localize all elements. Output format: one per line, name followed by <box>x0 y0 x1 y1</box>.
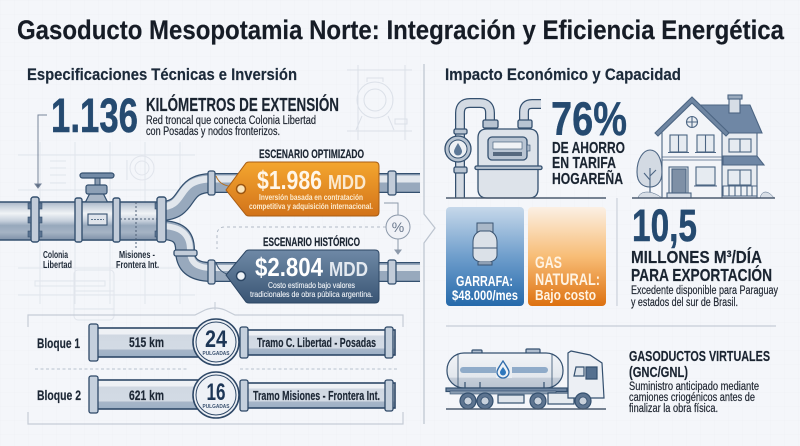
row: bloque 2: PULGADAS <box>202 404 230 410</box>
icon: tanker truck <box>446 349 604 409</box>
stat: 76%: HOGAREÑA <box>552 168 623 188</box>
stat: 1.136 km: 1.136 <box>51 90 138 143</box>
text: gasoductos virtuales <box>629 349 770 415</box>
stat: 76%: EN TARIFA <box>552 155 616 172</box>
row: bloque 2: 621 km <box>129 388 164 403</box>
price tag: historical: Costo estimado bajo valores <box>268 281 355 290</box>
card: gas natural: Bajo costo <box>535 287 596 304</box>
valve body <box>78 202 117 240</box>
label: Colonia Libertad: Colonia <box>43 250 68 261</box>
price tag: optimized: MDD <box>328 172 366 194</box>
price tag: optimized: $1.986 <box>257 165 322 195</box>
stat: 10,5 exportacion: MILLONES M³/DÍA <box>631 246 762 267</box>
comparison: percent icon and arrows: % <box>392 219 404 235</box>
scenario heading: optimizado: ESCENARIO OPTIMIZADO <box>259 149 364 161</box>
card: gas natural <box>528 207 606 306</box>
panel: pipeline blocks <box>28 302 403 424</box>
row: bloque 1: 24 <box>205 326 228 353</box>
row: bloque 1 <box>37 319 395 365</box>
icon: house <box>637 95 774 198</box>
stat: 1.136 km: KILÓMETROS DE EXTENSIÓN <box>146 94 339 115</box>
stat: 76% <box>551 92 627 188</box>
price tag: historical: $2.804 <box>255 252 323 282</box>
walls <box>722 130 757 198</box>
icon: gas meter <box>445 103 542 198</box>
dotted marker lines on the pipe <box>120 202 157 248</box>
stat: 76%: DE AHORRO <box>552 140 625 157</box>
vertical divider <box>616 198 618 306</box>
stat: 1.136 km <box>51 90 339 143</box>
valve stem and wheel <box>95 176 100 188</box>
card: garrafa <box>446 207 524 306</box>
stat: 10,5 exportacion: y estados del sur de Brasil. <box>631 297 738 309</box>
text: gasoductos virtuales: (GNC/GNL) <box>629 365 688 381</box>
card: garrafa: GARRAFA: <box>456 273 513 290</box>
comparison: percent icon and arrows <box>217 203 410 254</box>
row: bloque 1: Tramo C. Libertad - Posadas <box>257 336 376 350</box>
windows <box>670 135 687 152</box>
lower branch <box>160 230 420 272</box>
price tag: optimized: Inversión basada en contratación <box>259 193 363 202</box>
price tag: historical: tradicionales de obra pública argentina. <box>250 290 373 299</box>
heading: right section: Impacto Económico y Capacidad <box>445 65 681 84</box>
label: Colonia Libertad: Libertad <box>43 260 72 271</box>
price tag: historical: MDD <box>329 259 368 281</box>
row: bloque 2: 16 <box>206 379 226 406</box>
card: gas natural: GAS <box>535 253 562 272</box>
pipeline diagram <box>0 171 420 284</box>
row: bloque 2: Tramo Misiones - Frontera Int. <box>253 389 380 403</box>
ground line: truck <box>446 408 606 410</box>
stat: 1.136 km: con Posadas y nodos fronterizos. <box>146 126 280 138</box>
heading: left section: Especificaciones Técnicas e Inversión <box>27 65 297 84</box>
blueprint sketch: top right of left panel <box>347 65 412 140</box>
column divider with chevron <box>424 64 435 424</box>
ground line: meter <box>446 197 606 199</box>
arrow: from stat to pipeline <box>35 115 47 188</box>
tree <box>644 168 656 198</box>
price tag: optimized: competitiva y adquisición internacional. <box>249 202 373 211</box>
main pipe <box>0 202 163 240</box>
price tag: optimized <box>216 162 379 216</box>
label: Colonia Libertad <box>43 250 72 271</box>
flanges <box>31 197 39 242</box>
blueprint sketch: behind valve <box>18 142 195 320</box>
label: Misiones - Frontera Int.: Frontera Int. <box>116 260 159 271</box>
row: bloque 1: PULGADAS <box>202 351 230 357</box>
label: Misiones - Frontera Int. <box>116 250 159 271</box>
divider: above virtual pipelines <box>446 325 776 327</box>
card: gas natural: NATURAL: <box>535 270 600 289</box>
label: Misiones - Frontera Int.: Misiones - <box>119 250 155 261</box>
text: gasoductos virtuales: Suministro anticipado mediante <box>629 381 759 393</box>
stat: 1.136 km: Red troncal que conecta Colonia Libertad <box>146 115 316 127</box>
scenario heading: historico: ESCENARIO HISTÓRICO <box>263 236 360 249</box>
text: gasoductos virtuales: camiones criogénicos antes de <box>629 392 755 404</box>
stat: 10,5 exportacion <box>631 200 778 309</box>
row: bloque 1: 515 km <box>129 335 164 350</box>
roof <box>700 105 762 133</box>
row: bloque 1: Bloque 1 <box>37 335 80 351</box>
ground line: house <box>632 197 775 199</box>
stat: 10,5 exportacion: 10,5 <box>632 200 697 251</box>
icon: gas cylinder <box>473 223 497 265</box>
text: gasoductos virtuales: finalizar la obra física. <box>629 403 718 415</box>
row: bloque 2 <box>37 372 395 418</box>
stat: 76%: 76% <box>551 92 627 145</box>
price tag: historical <box>216 250 379 303</box>
card: garrafa: $48.000/mes <box>452 288 518 303</box>
upper branch <box>160 183 420 211</box>
row: bloque 2: Bloque 2 <box>37 387 81 403</box>
